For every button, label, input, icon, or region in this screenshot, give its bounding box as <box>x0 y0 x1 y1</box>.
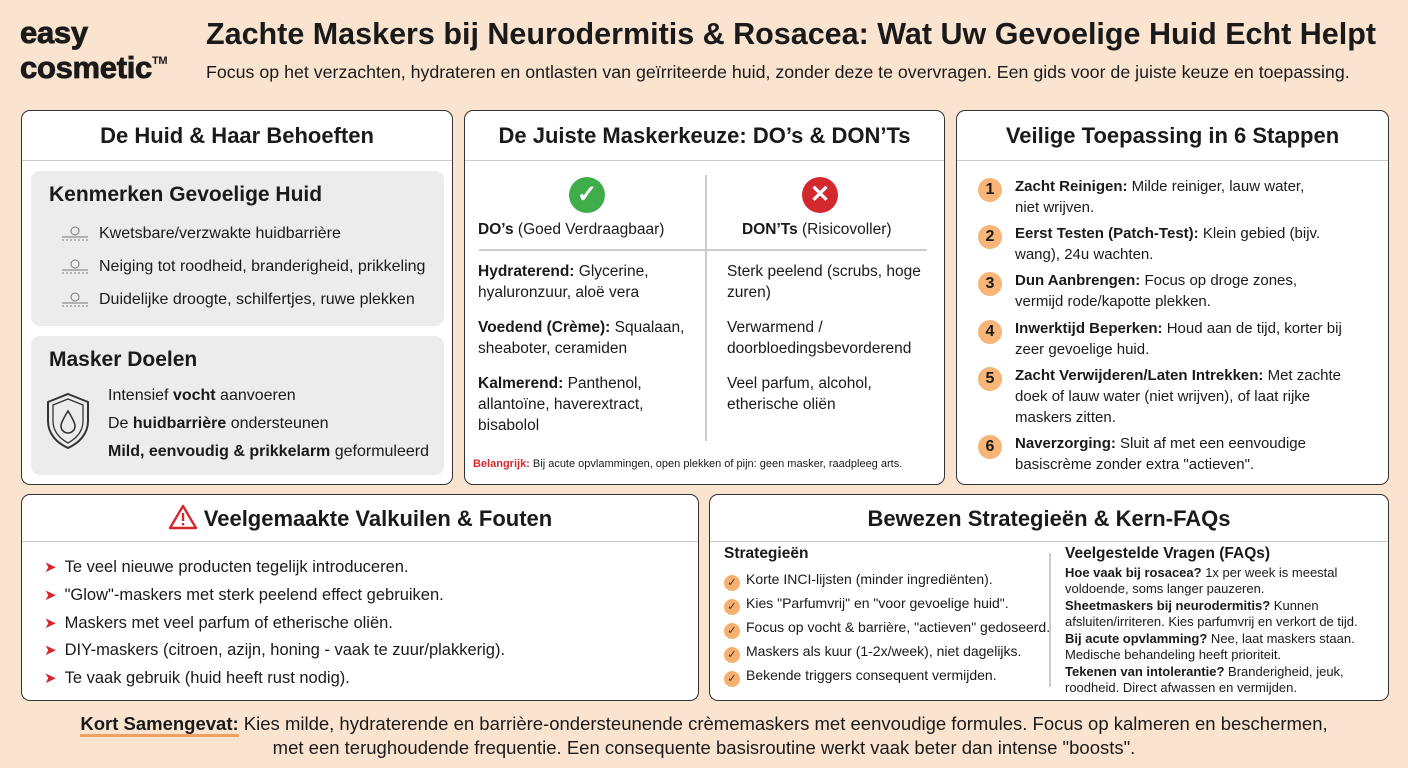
list kenmerken: Kwetsbare/verzwakte huidbarrière <box>99 225 341 242</box>
summary footer: met een terughoudende frequentie. Een consequente basisroutine werkt vaak beter dan intense "boosts". <box>273 737 1135 758</box>
do list <box>478 263 684 434</box>
strategieen: Bekende triggers consequent vermijden. <box>746 667 997 683</box>
list valkuilen: ➤ Maskers met veel parfum of etherische oliën. <box>44 614 393 632</box>
steps list: Naverzorging: Sluit af met een eenvoudige <box>1015 435 1306 452</box>
list kenmerken <box>62 225 425 308</box>
list doelen: Intensief vocht aanvoeren <box>108 387 296 404</box>
column header dont: DON’Ts (Risicovoller) <box>742 221 892 238</box>
dont list: Veel parfum, alcohol, etherische oliën <box>727 375 872 413</box>
logo: easy <box>20 15 88 50</box>
list valkuilen: ➤ Te vaak gebruik (huid heeft rust nodig). <box>44 669 350 687</box>
dont list: Sterk peelend (scrubs, hoge zuren) <box>727 263 921 301</box>
strategieen: Focus op vocht & barrière, "actieven" gedoseerd. <box>746 619 1050 635</box>
heading: Bewezen Strategieën & Kern-FAQs <box>867 506 1231 531</box>
panel: strategieen & faqs <box>709 494 1389 701</box>
panel: 6 stappen <box>956 110 1389 485</box>
list valkuilen: ➤ DIY-maskers (citroen, azijn, honing - vaak te zuur/plakkerig). <box>44 641 505 659</box>
strategieen: Korte INCI-lijsten (minder ingrediënten). <box>746 571 993 587</box>
subtitle: Focus op het verzachten, hydrateren en ontlasten van geïrriteerde huid, zonder deze te overvragen. Een gids voor de juiste keuze en toepassing. <box>206 62 1350 82</box>
heading kenmerken: Kenmerken Gevoelige Huid <box>49 183 322 206</box>
steps list: 2 <box>986 228 994 245</box>
steps list: 5 <box>986 370 994 387</box>
panel: do's & don'ts <box>464 110 945 485</box>
steps list: zeer gevoelige huid. <box>1015 341 1149 358</box>
steps list: 4 <box>986 323 994 340</box>
faqs <box>1065 545 1358 694</box>
list kenmerken: Neiging tot roodheid, branderigheid, prikkeling <box>99 258 425 275</box>
steps list: Eerst Testen (Patch-Test): Klein gebied (bijv. <box>1015 225 1320 242</box>
strategieen: ✓ <box>727 625 737 637</box>
summary footer <box>80 713 1328 758</box>
faqs: Tekenen van intolerantie? Branderigheid, jeuk, roodheid. Direct afwassen en vermijden. <box>1065 664 1344 694</box>
steps list: 1 <box>986 181 994 198</box>
logo <box>20 15 167 85</box>
logo: cosmeticTM <box>20 50 167 85</box>
title: Zachte Maskers bij Neurodermitis & Rosacea: Wat Uw Gevoelige Huid Echt Helpt <box>206 17 1376 51</box>
steps list: Inwerktijd Beperken: Houd aan de tijd, korter bij <box>1015 320 1342 337</box>
list kenmerken: Duidelijke droogte, schilfertjes, ruwe plekken <box>99 291 415 308</box>
steps list: 6 <box>986 438 994 455</box>
do list: Kalmerend: Panthenol, allantoïne, haverextract, bisabolol <box>478 375 643 434</box>
steps list: vermijd rode/kapotte plekken. <box>1015 293 1211 310</box>
heading <box>465 111 944 161</box>
icon: check: ✓ <box>577 181 597 208</box>
steps list: Dun Aanbrengen: Focus op droge zones, <box>1015 272 1297 289</box>
heading: De Huid & Haar Behoeften <box>100 123 374 148</box>
sub panel: masker doelen <box>31 336 444 475</box>
icon: cross: ✕ <box>810 181 830 208</box>
list valkuilen <box>44 558 505 687</box>
strategieen: Maskers als kuur (1-2x/week), niet dagelijks. <box>746 643 1021 659</box>
heading <box>22 111 452 161</box>
list doelen: De huidbarrière ondersteunen <box>108 415 329 432</box>
summary footer: Kort Samengevat: Kies milde, hydraterende en barrière-ondersteunende crèmemaskers met eenvoudige formules. Focus op kalmeren en beschermen, <box>80 713 1328 734</box>
heading <box>710 495 1388 542</box>
dont list: Verwarmend / doorbloedingsbevorderend <box>727 319 911 357</box>
strategieen <box>724 545 1050 687</box>
steps list: Zacht Reinigen: Milde reiniger, lauw water, <box>1015 178 1304 195</box>
steps list: 3 <box>986 275 994 292</box>
faqs: Bij acute opvlamming? Nee, laat maskers staan. Medische behandeling heeft prioriteit. <box>1065 631 1355 662</box>
strategieen: ✓ <box>727 577 737 589</box>
steps list: Zacht Verwijderen/Laten Intrekken: Met zachte <box>1015 367 1341 384</box>
strategieen: Kies "Parfumvrij" en "voor gevoelige huid". <box>746 595 1009 611</box>
icon: shield drop <box>47 392 89 450</box>
strategieen: Strategieën <box>724 545 808 562</box>
steps list: basiscrème zonder extra "actieven". <box>1015 456 1254 473</box>
faqs: Veelgestelde Vragen (FAQs) <box>1065 545 1270 562</box>
list doelen <box>108 387 429 460</box>
do list: Hydraterend: Glycerine, hyaluronzuur, aloë vera <box>478 263 649 301</box>
sub panel: kenmerken <box>31 171 444 326</box>
steps list: doek of lauw water (niet wrijven), of laat rijke <box>1015 388 1310 405</box>
strategieen: ✓ <box>727 601 737 613</box>
steps list: wang), 24u wachten. <box>1015 246 1153 263</box>
strategieen: ✓ <box>727 673 737 685</box>
heading: De Juiste Maskerkeuze: DO’s & DON’Ts <box>498 123 911 148</box>
icon: cross <box>802 177 838 213</box>
panel: huid & haar behoeften <box>21 110 453 485</box>
faqs: Sheetmaskers bij neurodermitis? Kunnen afsluiten/irriteren. Kies parfumvrij en verkort de tijd. <box>1065 598 1358 628</box>
heading <box>957 111 1388 161</box>
strategieen: ✓ <box>727 649 737 661</box>
column header do: DO’s (Goed Verdraagbaar) <box>478 221 664 238</box>
list doelen: Mild, eenvoudig & prikkelarm geformuleerd <box>108 443 429 460</box>
icon: check <box>569 177 605 213</box>
list valkuilen: ➤ "Glow"-maskers met sterk peelend effect gebruiken. <box>44 586 444 604</box>
heading: Veelgemaakte Valkuilen & Fouten <box>204 506 552 531</box>
panel: valkuilen <box>21 494 699 701</box>
steps list <box>978 178 1342 473</box>
steps list: niet wrijven. <box>1015 199 1094 216</box>
list valkuilen: ➤ Te veel nieuwe producten tegelijk introduceren. <box>44 558 409 576</box>
do list: Voedend (Crème): Squalaan, sheaboter, ceramiden <box>478 319 684 357</box>
faqs: Hoe vaak bij rosacea? 1x per week is meestal voldoende, soms langer pauzeren. <box>1065 565 1337 596</box>
steps list: maskers zitten. <box>1015 409 1116 426</box>
heading masker doelen: Masker Doelen <box>49 348 197 371</box>
note belangrijk: Belangrijk: Bij acute opvlammingen, open plekken of pijn: geen masker, raadpleeg arts. <box>473 458 902 470</box>
heading <box>22 495 698 542</box>
dont list <box>727 263 921 413</box>
heading: Veilige Toepassing in 6 Stappen <box>1006 123 1339 148</box>
